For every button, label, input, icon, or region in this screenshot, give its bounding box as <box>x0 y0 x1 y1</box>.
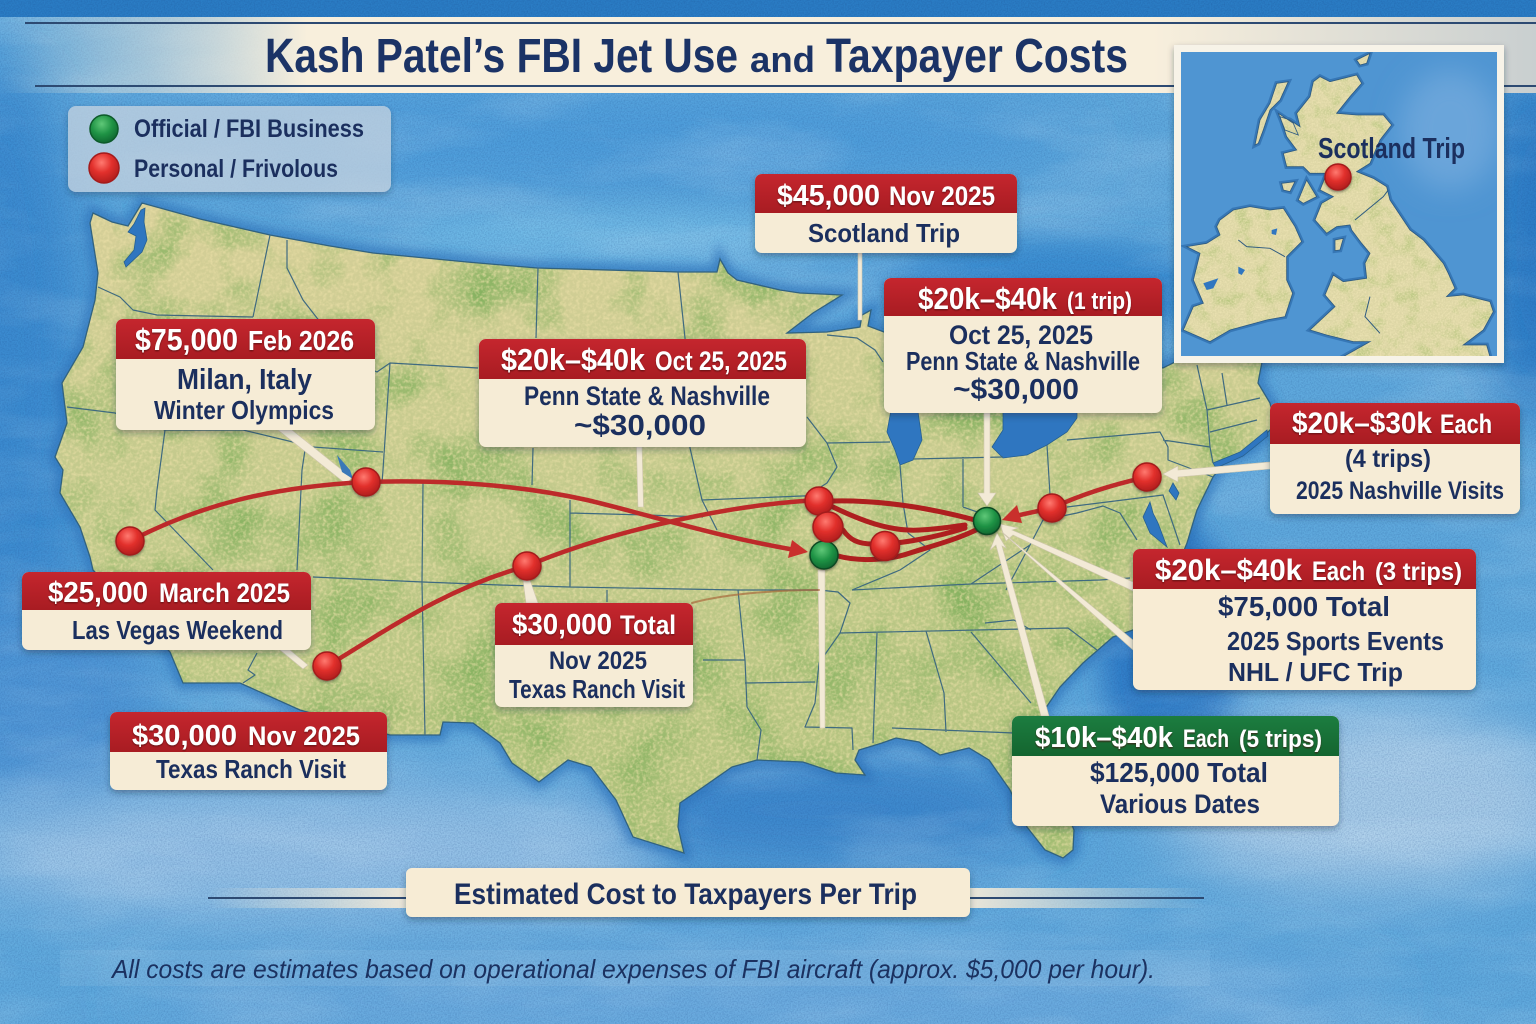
callout: Scotland trip cost: $45,000 <box>777 180 880 212</box>
callout: Penn State Oct 25: Penn State & Nashville <box>524 381 770 411</box>
callout: Penn State Oct 25: Oct 25, 2025 <box>655 346 787 376</box>
callout: sports events: (3 trips) <box>1375 558 1462 586</box>
route cluster: Missouri to Nashville <box>833 501 976 560</box>
callout: Penn State Oct 25: ~$30,000 <box>574 410 706 442</box>
callout: Penn State 1 trip: Oct 25, 2025 <box>949 320 1093 350</box>
marker: Illinois <box>870 532 900 560</box>
caption banner: estimated cost <box>208 868 1204 917</box>
callout: Milan: Milan, Italy <box>177 364 312 396</box>
flight routes <box>130 477 1147 666</box>
callout: Nashville visits: Each <box>1440 409 1492 439</box>
marker: Las Vegas <box>116 527 144 555</box>
callout: Las Vegas: $25,000 <box>48 577 148 609</box>
caption banner: estimated cost: Estimated Cost to Taxpayers Per Trip <box>454 878 917 911</box>
callout: Penn State Oct 25 <box>479 339 806 447</box>
callout: Milan: $75,000 <box>135 322 238 357</box>
marker: West Virginia <box>1038 494 1066 522</box>
callout: Milan: Feb 2026 <box>248 325 354 356</box>
map: contiguous United States <box>55 203 1275 858</box>
callout: official business: Various Dates <box>1100 789 1260 819</box>
callout: Penn State 1 trip: (1 trip) <box>1067 288 1132 315</box>
legend marker: personal <box>89 153 119 183</box>
callout: official business: $10k–$40k <box>1035 722 1174 754</box>
callout: sports events: $75,000 Total <box>1218 591 1390 622</box>
callout: Texas ranch visit: Nov 2025 <box>248 721 360 751</box>
callout: Milan <box>116 319 375 430</box>
callout: sports events: Each <box>1312 556 1365 586</box>
legend marker: official <box>90 115 118 143</box>
callout: Las Vegas: Las Vegas Weekend <box>72 615 283 645</box>
route: faint Texas link <box>692 590 819 603</box>
callout: Penn State 1 trip: $20k–$40k <box>918 281 1058 316</box>
legend label: official: Official / FBI Business <box>134 115 364 143</box>
callout: sports events: NHL / UFC Trip <box>1228 657 1403 687</box>
callout: Penn State 1 trip: Penn State & Nashville <box>906 346 1140 376</box>
title text: Kash Patel’s FBI Jet Use <box>265 30 738 83</box>
callout: Milan: Winter Olympics <box>154 395 334 425</box>
marker: Missouri middle <box>813 512 843 542</box>
callout: Texas total: Total <box>620 610 676 640</box>
leader lines from callouts to map markers <box>278 253 1270 728</box>
marker: Milan origin <box>352 468 380 496</box>
callout: Penn State 1 trip <box>884 278 1162 413</box>
callout: Texas total: Nov 2025 <box>549 647 647 675</box>
callout: Penn State Oct 25: $20k–$40k <box>501 342 646 377</box>
title text <box>265 30 1128 83</box>
callout: Texas ranch visit: Texas Ranch Visit <box>156 754 346 784</box>
title text: Taxpayer Costs <box>826 30 1128 83</box>
marker: Texas ranch west <box>313 652 341 680</box>
callout: Scotland trip cost: Nov 2025 <box>889 181 995 211</box>
callout: sports events: 2025 Sports Events <box>1227 626 1444 656</box>
callout: official business: $125,000 Total <box>1090 757 1268 788</box>
callout: Las Vegas <box>22 572 311 650</box>
callout: Texas total: $30,000 <box>512 609 612 641</box>
marker: Missouri top <box>805 487 833 515</box>
title text: and <box>750 39 815 80</box>
callout: Las Vegas: March 2025 <box>159 578 290 608</box>
title banner <box>0 17 1536 93</box>
panel: legend <box>68 106 391 192</box>
panel: Scotland inset map <box>1174 45 1504 363</box>
callout: Texas total: Texas Ranch Visit <box>509 674 685 704</box>
callout: Nashville visits: $20k–$30k <box>1292 407 1432 440</box>
callout: Scotland trip cost <box>755 174 1017 253</box>
callout: Nashville visits: (4 trips) <box>1345 445 1431 473</box>
route: Texas to Missouri <box>327 500 819 666</box>
legend label: personal: Personal / Frivolous <box>134 155 338 183</box>
marker: Texas ranch <box>513 552 541 580</box>
inset label: Scotland Trip <box>1318 133 1465 165</box>
map markers <box>116 463 1161 680</box>
callout: Scotland trip cost: Scotland Trip <box>808 218 960 248</box>
callout: Texas total <box>495 603 693 707</box>
route: across to Missouri with arrow <box>366 481 808 558</box>
callout: sports events: $20k–$40k <box>1155 554 1302 587</box>
inset marker: Scotland <box>1325 164 1351 190</box>
callout: official business: (5 trips) <box>1239 726 1322 753</box>
callout: Penn State 1 trip: ~$30,000 <box>953 374 1079 406</box>
callout: official business <box>1012 716 1339 826</box>
footnote: All costs are estimates based on operational expenses of FBI aircraft (approx. $5,000 per hour). <box>110 954 1155 984</box>
marker: Pennsylvania <box>1133 463 1161 491</box>
marker: official Missouri <box>810 541 838 569</box>
route: Las Vegas to Denver area <box>130 482 366 541</box>
callout: Texas ranch visit <box>110 712 387 790</box>
callout: Nashville visits: 2025 Nashville Visits <box>1296 477 1504 505</box>
marker: official hub <box>974 508 1000 534</box>
route: Pennsylvania to Nashville with arrow <box>1002 477 1147 523</box>
callout: sports events <box>1133 549 1476 690</box>
callout: Nashville visits <box>1270 403 1520 514</box>
callout: official business: Each <box>1183 725 1229 753</box>
callout: Texas ranch visit: $30,000 <box>132 720 237 752</box>
